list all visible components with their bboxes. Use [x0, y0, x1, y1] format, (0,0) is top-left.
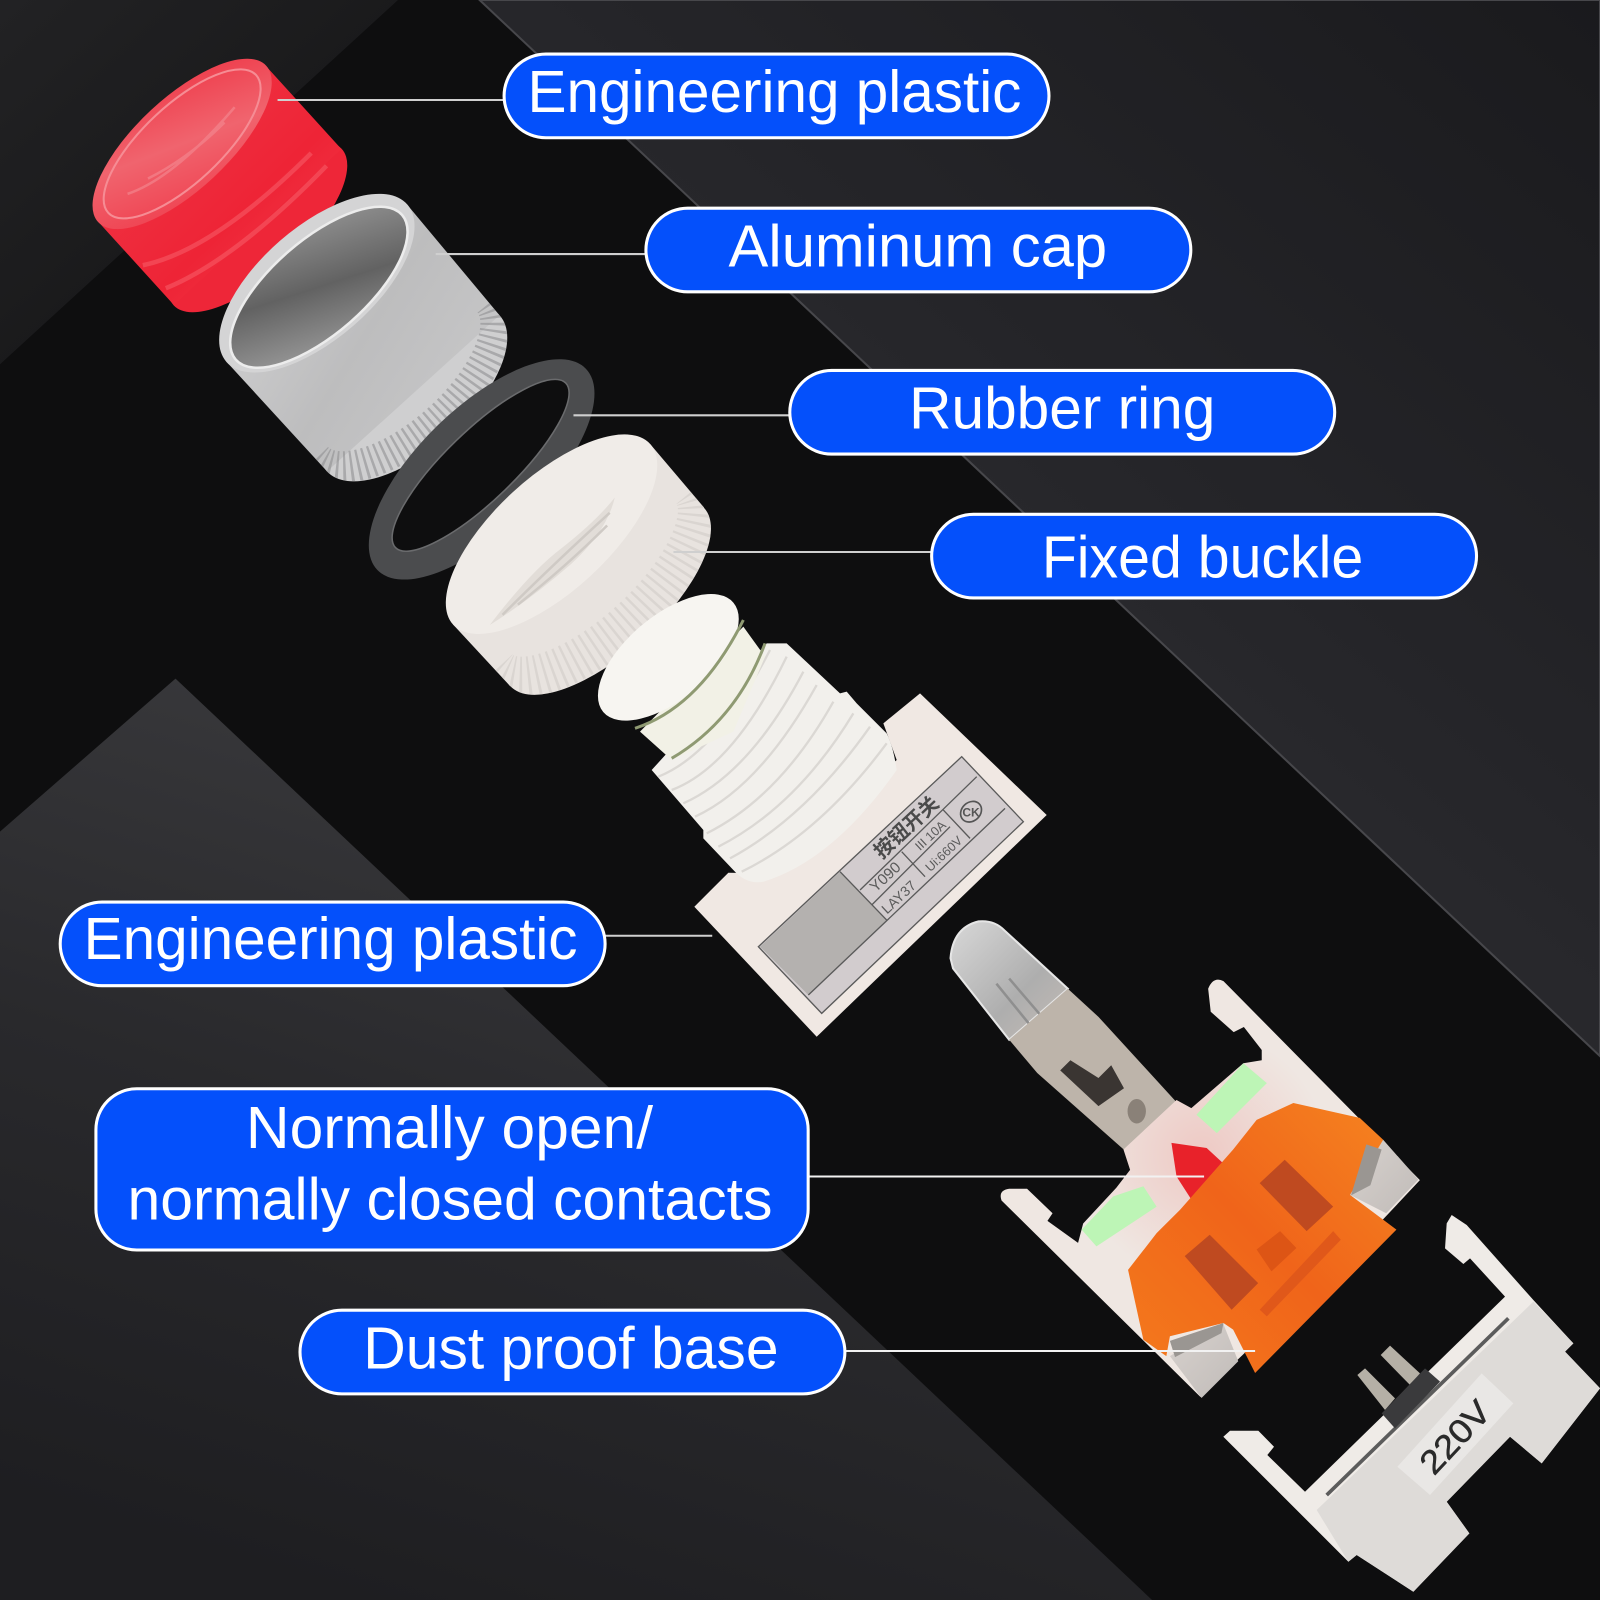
housing block: [694, 693, 1047, 1037]
part: indicator bulb: [951, 921, 1180, 1152]
part: dust proof base: [1223, 1215, 1600, 1592]
terminal pins: [1357, 1368, 1395, 1410]
label: Dust proof base: [300, 1310, 845, 1394]
background panel: bottom left: [0, 679, 1152, 1600]
label: Dust proof base: Dust proof base: [363, 1314, 779, 1381]
nameplate label: LAY37: [878, 877, 919, 917]
white frame: [1001, 980, 1420, 1397]
label: Aluminum cap: [646, 208, 1191, 292]
background panel: top left: [0, 0, 398, 364]
part: red engineering plastic lens: [67, 32, 373, 339]
leader line: aluminum cap: [436, 253, 647, 255]
screw terminals: [1351, 1144, 1382, 1195]
leader line: engineering plastic body: [603, 935, 712, 937]
leader line: rubber ring: [573, 414, 791, 416]
nameplate label: Y090: [867, 859, 905, 896]
nameplate label: CK: [962, 805, 980, 819]
part: rubber ring: [334, 324, 629, 615]
glass envelope: [951, 921, 1068, 1040]
leader line: contacts: [807, 1176, 1204, 1178]
neck: [640, 627, 765, 760]
label: Normally open / normally closed contacts: [96, 1089, 808, 1250]
stem top cap: [576, 571, 760, 744]
label: Engineering plastic body: Engineering plastic: [84, 905, 578, 972]
orange cover: [1128, 1103, 1396, 1373]
nameplate label: [758, 757, 1023, 1013]
label: Normally open / normally closed contacts: normally closed contacts: [128, 1165, 772, 1232]
metal base: [1009, 989, 1180, 1152]
part: fixed buckle: [446, 434, 711, 695]
threaded collar: [652, 643, 897, 882]
label: Fixed buckle: [932, 514, 1477, 598]
label: Rubber ring: Rubber ring: [909, 375, 1215, 442]
part: contact block: [1001, 980, 1420, 1398]
red arrow marker: [1171, 1143, 1227, 1199]
part: switch body with threaded stem: [576, 571, 1047, 1037]
label: Engineering plastic: Engineering plastic: [528, 58, 1021, 125]
voltage label: [1397, 1373, 1513, 1495]
metal rings: [635, 620, 765, 758]
label: Normally open / normally closed contacts: Normally open/: [246, 1094, 654, 1161]
label: Fixed buckle: Fixed buckle: [1042, 524, 1363, 591]
leader line: dust proof base: [843, 1350, 1255, 1352]
leader line: engineering plastic lens: [278, 99, 505, 101]
voltage label: 220V: [1413, 1393, 1499, 1482]
label: Rubber ring: [790, 370, 1335, 454]
grey terminal recesses: [1350, 1140, 1418, 1213]
nameplate label: III 10A: [912, 818, 949, 853]
green contacts: [1196, 1063, 1267, 1133]
leader line: fixed buckle: [673, 551, 933, 553]
label: Aluminum cap: Aluminum cap: [729, 212, 1107, 279]
background panel: top right: [480, 0, 1600, 1056]
nameplate label: Ui:660V: [923, 833, 966, 875]
slot: [1327, 1318, 1508, 1495]
nameplate label: 按钮开关: [870, 792, 944, 863]
part: aluminum cap: [219, 194, 508, 482]
